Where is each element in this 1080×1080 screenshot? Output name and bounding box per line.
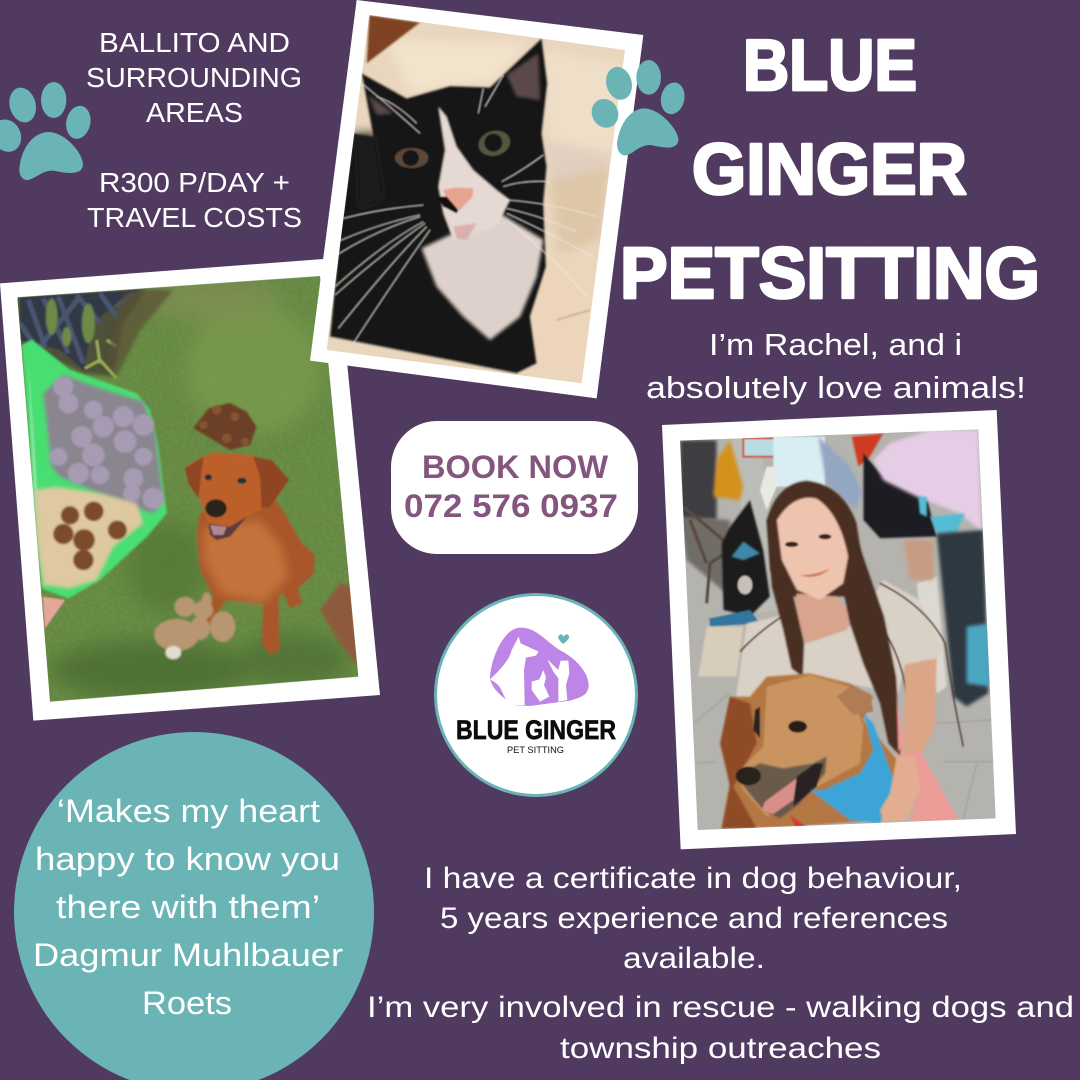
testimonial circle bbox=[14, 732, 374, 1080]
long hair bbox=[767, 510, 804, 677]
testimonial circle: there with them’ bbox=[56, 889, 320, 925]
testimonial circle: ‘Makes my heart bbox=[57, 793, 320, 829]
text: rescue involvement bbox=[367, 991, 1074, 1065]
text: qualifications: I have a certificate in dog behaviour, bbox=[424, 862, 962, 895]
logo: Blue Ginger pet sitting: PET SITTING bbox=[507, 745, 564, 756]
heading: Blue Ginger Petsitting: BLUE bbox=[743, 26, 917, 106]
text: service area and price: SURROUNDING bbox=[86, 62, 302, 93]
logo: Blue Ginger pet sitting bbox=[436, 594, 636, 796]
text: service area and price: BALLITO AND bbox=[99, 27, 290, 58]
text: introduction: I’m Rachel, and i bbox=[709, 327, 962, 362]
heading: Blue Ginger Petsitting bbox=[620, 26, 1040, 314]
icon: logo animals bbox=[490, 628, 589, 706]
button: book now: 072 576 0937 bbox=[404, 488, 618, 524]
testimonial circle: Dagmur Muhlbauer bbox=[33, 937, 343, 973]
text: introduction bbox=[646, 327, 1026, 405]
photo: tuxedo cat bbox=[310, 0, 643, 398]
icon: paw print left bbox=[0, 82, 94, 180]
garden fence bbox=[17, 288, 173, 378]
button: book now bbox=[391, 421, 638, 554]
whiskers bbox=[335, 75, 597, 343]
testimonial circle: happy to know you bbox=[35, 841, 340, 877]
plush toy bbox=[154, 592, 235, 659]
logo: Blue Ginger pet sitting: BLUE GINGER bbox=[456, 715, 616, 745]
icon: paw print right bbox=[587, 60, 687, 155]
testimonial circle: Roets bbox=[142, 985, 232, 1021]
dog bbox=[185, 452, 315, 655]
cat body bbox=[330, 38, 547, 373]
text: service area and price: R300 P/DAY + bbox=[99, 167, 290, 198]
dirt patch bbox=[320, 583, 358, 667]
rescue dog bbox=[720, 673, 920, 828]
button: book now: BOOK NOW bbox=[422, 449, 609, 485]
text: service area and price: TRAVEL COSTS bbox=[87, 202, 302, 233]
heading: Blue Ginger Petsitting: PETSITTING bbox=[620, 234, 1040, 314]
lick mat bbox=[22, 339, 167, 628]
text: rescue involvement: township outreaches bbox=[560, 1032, 881, 1065]
photo: dog in garden bbox=[0, 258, 380, 721]
text: rescue involvement: I’m very involved in rescue - walking dogs and bbox=[367, 991, 1074, 1024]
dirt mound bbox=[193, 403, 257, 450]
photo: Rachel with dog bbox=[662, 410, 1016, 849]
text: service area and price: AREAS bbox=[146, 97, 243, 128]
text: introduction: absolutely love animals! bbox=[646, 370, 1026, 405]
woman bbox=[736, 481, 963, 822]
heading: Blue Ginger Petsitting: GINGER bbox=[692, 130, 967, 210]
text: qualifications: available. bbox=[623, 942, 765, 975]
text: service area and price bbox=[86, 27, 302, 233]
text: qualifications bbox=[424, 862, 962, 975]
text: qualifications: 5 years experience and references bbox=[440, 902, 948, 935]
cafe background bbox=[680, 430, 993, 818]
